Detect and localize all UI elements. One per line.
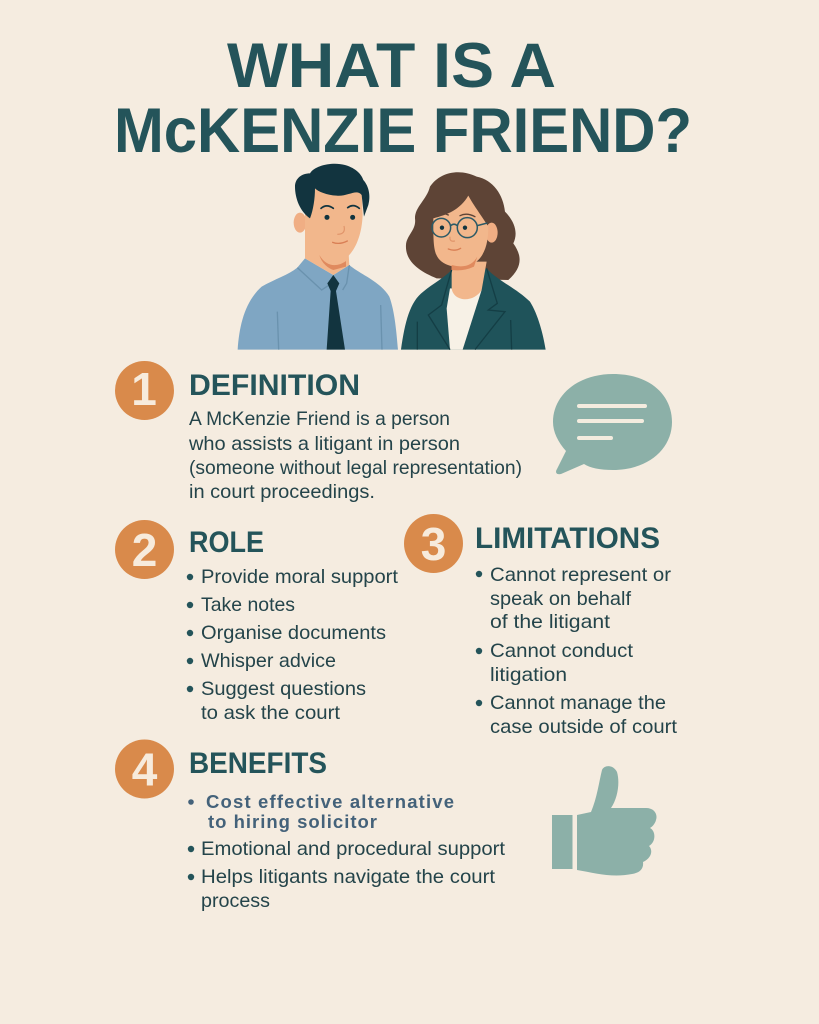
heading: definition: DEFINITION [189, 369, 360, 402]
heading: limitations: LIMITATIONS [475, 522, 660, 555]
benefits list: to hiring solicitor [208, 811, 377, 832]
limitations list: litigation [490, 664, 567, 686]
limitations list [476, 564, 678, 738]
limitations list: Cannot represent or [490, 564, 672, 586]
number badge 1: 1 [131, 363, 157, 415]
title: McKENZIE FRIEND? [114, 96, 692, 166]
limitations list: Cannot conduct [490, 640, 634, 662]
limitations list: speak on behalf [490, 588, 632, 610]
role list: Whisper advice [201, 650, 336, 672]
number badge 2: 2 [132, 524, 157, 576]
limitations list: Cannot manage the [490, 692, 666, 714]
limitations list: of the litigant [490, 611, 611, 633]
icon: thumbs up [552, 766, 657, 875]
benefits list: Cost effective alternative [206, 791, 454, 812]
section 3: limitations [404, 514, 678, 738]
number badge 3: 3 [421, 518, 446, 570]
title [114, 31, 692, 166]
role list [187, 566, 399, 724]
role list: Organise documents [201, 622, 386, 644]
number badge 1 [115, 361, 174, 420]
role list: to ask the court [201, 702, 341, 724]
man [238, 164, 398, 350]
section 1: definition [115, 361, 522, 503]
woman [401, 172, 546, 350]
section 4: benefits [115, 740, 506, 912]
number badge 4: 4 [132, 744, 158, 796]
benefits list: Helps litigants navigate the court [201, 866, 496, 888]
definition text: in court proceedings. [189, 481, 375, 503]
limitations list: case outside of court [490, 716, 678, 738]
heading: role: ROLE [189, 526, 264, 559]
definition text: A McKenzie Friend is a person [189, 408, 450, 430]
benefits list: Emotional and procedural support [201, 838, 506, 860]
number badge 4 [115, 740, 174, 798]
icon: speech bubble [553, 374, 672, 474]
definition text: who assists a litigant in person [188, 433, 460, 455]
number badge 2 [115, 520, 174, 579]
benefits list [188, 791, 506, 912]
definition text: (someone without legal representation) [189, 457, 522, 479]
heading: benefits: BENEFITS [189, 747, 327, 780]
section 2: role [115, 520, 399, 724]
number badge 3 [404, 514, 463, 573]
role list: Suggest questions [201, 678, 366, 700]
role list: Provide moral support [201, 566, 399, 588]
role list: Take notes [201, 594, 295, 616]
benefits list: process [201, 890, 270, 912]
definition text [188, 408, 522, 503]
illustration: two people [238, 164, 546, 350]
title: WHAT IS A [227, 31, 556, 101]
